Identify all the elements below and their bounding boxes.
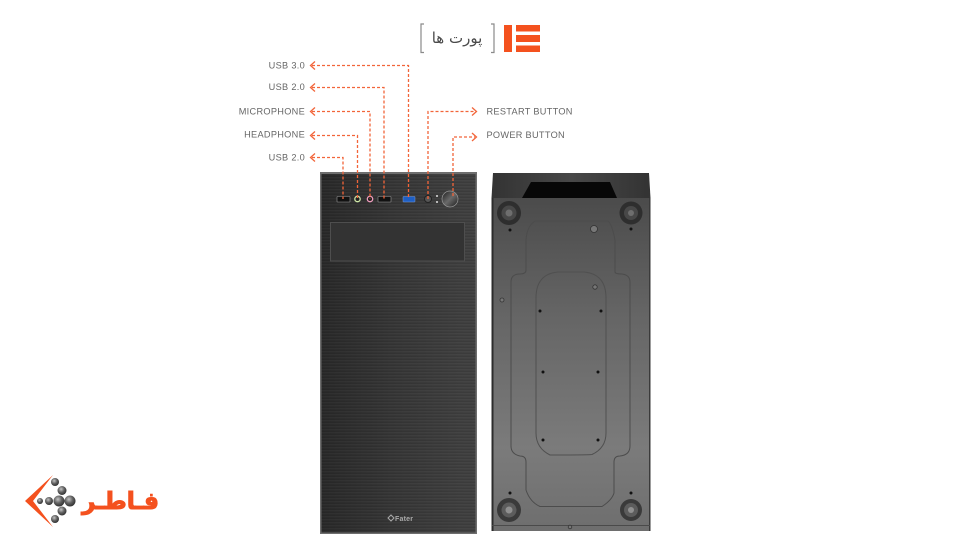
- label: USB 2.0 upper: USB 2.0: [269, 82, 305, 92]
- label: microphone: MICROPHONE: [239, 106, 305, 116]
- front panel ports: [337, 191, 458, 207]
- title heading: پورت ها: [432, 29, 482, 48]
- label: USB 3.0: USB 3.0: [269, 60, 305, 70]
- top cap: [492, 173, 650, 198]
- brand logo on case: Fater: [395, 516, 413, 523]
- back view of case: [492, 173, 650, 531]
- logo spheres: [37, 478, 76, 523]
- handle slot: [522, 182, 617, 198]
- leader: microphone: [312, 112, 370, 199]
- label: headphone: HEADPHONE: [244, 130, 305, 140]
- leader: USB 2.0 lower: [312, 158, 343, 199]
- title heading: [421, 24, 494, 52]
- leader: USB 2.0 upper: [312, 88, 384, 199]
- dashed callout leaders: [312, 66, 475, 199]
- label: restart button: RESTART BUTTON: [486, 106, 573, 116]
- leader: restart button: [428, 112, 475, 199]
- screws: [500, 226, 598, 529]
- brand logo on case: [388, 515, 413, 523]
- logo chevron: [25, 475, 53, 527]
- title icon: [504, 25, 540, 52]
- embossed outer outline: [511, 221, 630, 506]
- company logo: [25, 475, 159, 527]
- back plate: [492, 198, 650, 531]
- screw holes: [508, 228, 632, 494]
- leader: headphone: [312, 136, 358, 199]
- logo wordmark: فـاطـر: [81, 487, 159, 515]
- feet: [497, 201, 642, 522]
- drive bay cover: [330, 222, 464, 261]
- embossed inner outline: [536, 272, 606, 455]
- arrowheads: [310, 62, 476, 162]
- leader: USB 3.0: [312, 66, 408, 199]
- label: USB 2.0 lower: USB 2.0: [269, 152, 305, 162]
- leader: power button: [453, 137, 475, 196]
- label: power button: POWER BUTTON: [486, 130, 565, 140]
- front view of case: [320, 172, 477, 534]
